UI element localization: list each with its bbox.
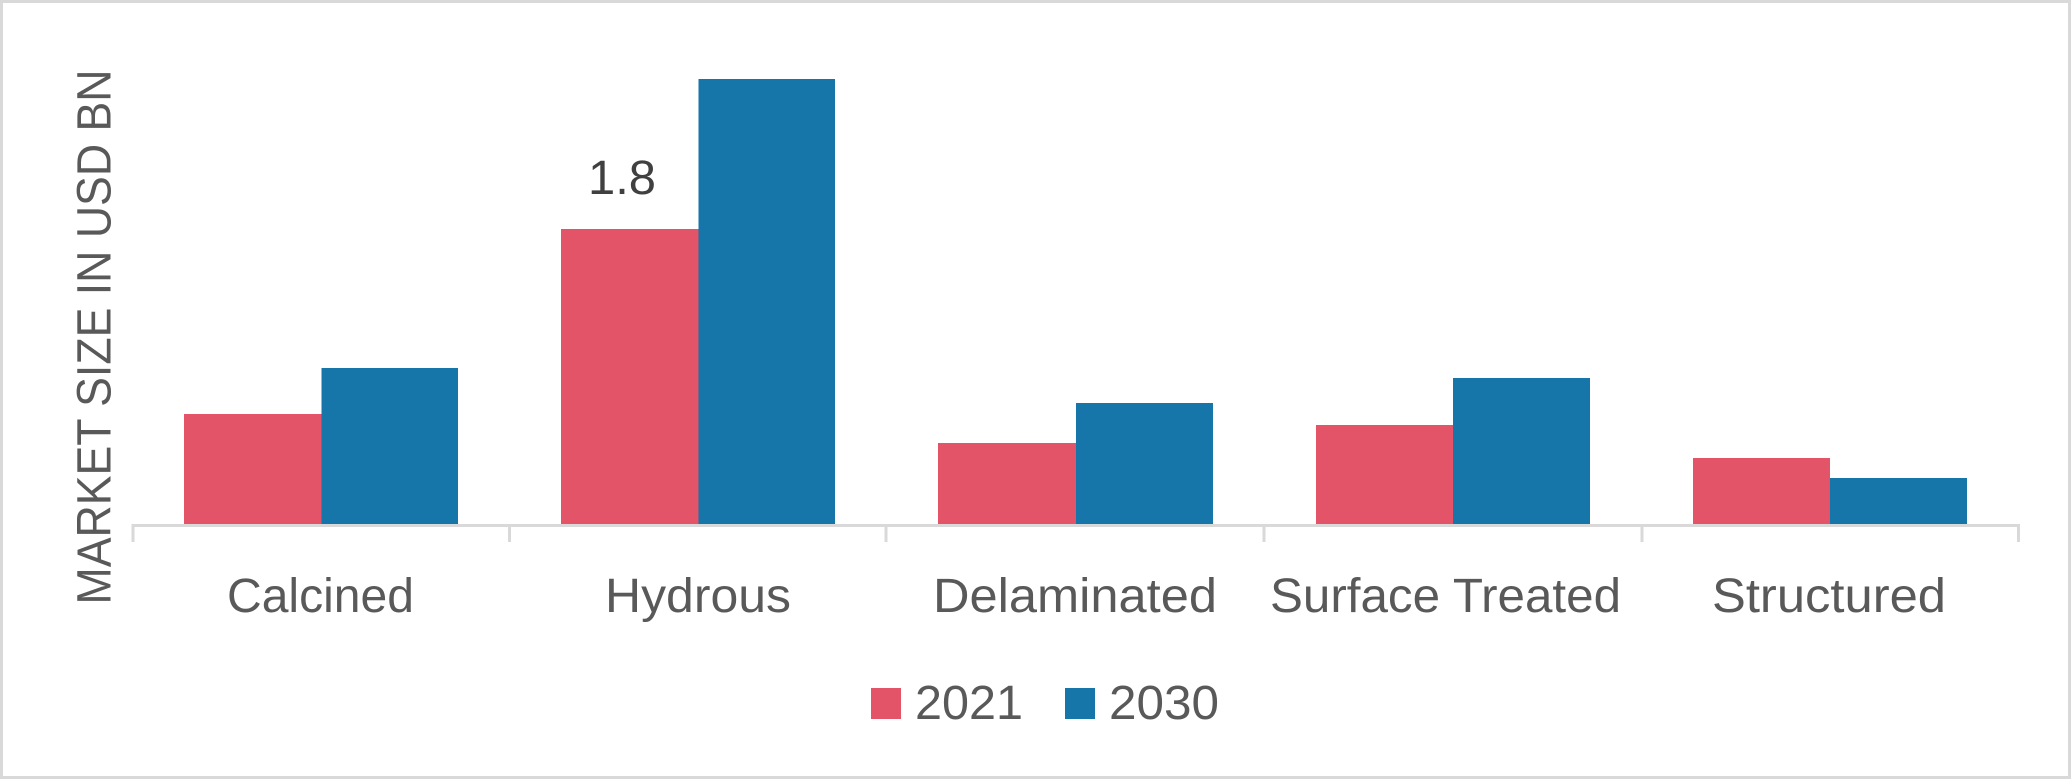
- bar: Structured 2021: [1693, 458, 1830, 524]
- bar: Surface Treated 2021: [1316, 425, 1453, 524]
- x axis line and ticks: [133, 526, 2018, 542]
- bar: Hydrous 2021: [561, 229, 698, 524]
- y-axis title: MARKET SIZE IN USD BN: [68, 70, 122, 604]
- bars: Calcined: [184, 368, 458, 524]
- legend label 2030: 2030: [1109, 677, 1219, 730]
- bar: Structured 2030: [1830, 478, 1967, 524]
- bar: Calcined 2021: [184, 414, 322, 524]
- bars: Structured: [1693, 458, 1967, 524]
- bar: Delaminated 2021: [938, 443, 1076, 524]
- bar: Calcined 2030: [322, 368, 458, 524]
- category labels: [227, 570, 1946, 623]
- label: Calcined: Calcined: [227, 570, 414, 623]
- bar: Delaminated 2030: [1076, 403, 1213, 524]
- label: Hydrous: Hydrous: [605, 570, 791, 623]
- legend: [871, 677, 1219, 730]
- label: Structured: Structured: [1712, 570, 1946, 623]
- legend swatch 2021: [871, 688, 901, 719]
- bars: Surface Treated: [1316, 378, 1590, 524]
- bar: Surface Treated 2030: [1453, 378, 1590, 524]
- legend label 2021: 2021: [915, 677, 1023, 730]
- bar: Hydrous 2030: [698, 79, 835, 524]
- bars: Hydrous: [561, 79, 835, 524]
- label: Delaminated: Delaminated: [933, 570, 1217, 623]
- data label: Hydrous 2021: 1.8: [588, 152, 656, 205]
- legend swatch 2030: [1065, 688, 1095, 719]
- bars: Delaminated: [938, 403, 1213, 524]
- label: Surface Treated: Surface Treated: [1270, 570, 1621, 623]
